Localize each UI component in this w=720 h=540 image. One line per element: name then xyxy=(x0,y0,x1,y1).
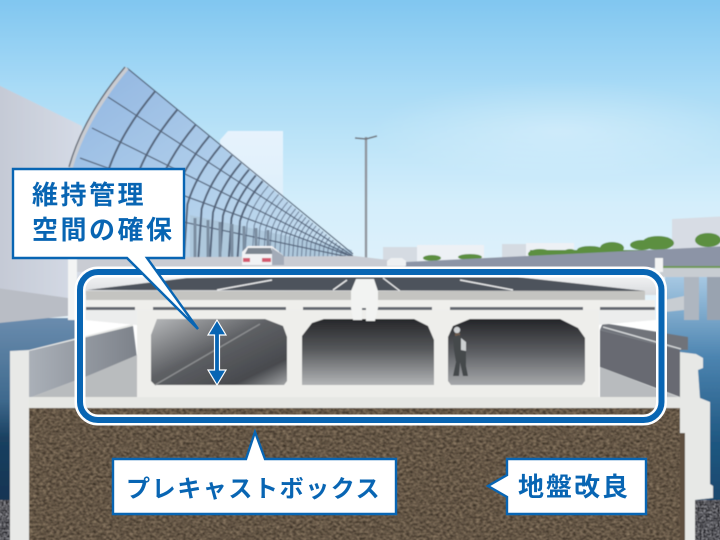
soil texture xyxy=(29,408,680,540)
left retaining wall xyxy=(10,324,133,540)
right frame post xyxy=(655,258,663,272)
callout text line 2: 空間の確保 xyxy=(32,215,175,245)
right overpass with piers xyxy=(405,246,720,320)
deck top band xyxy=(85,300,655,310)
right retaining wall xyxy=(660,340,713,540)
soil texture right edge xyxy=(680,433,685,540)
left cantilever xyxy=(85,310,137,325)
riprap rocks left xyxy=(0,500,10,540)
lane markings xyxy=(217,278,513,291)
box left cell lane line xyxy=(155,324,260,385)
box left cell xyxy=(151,319,287,385)
asphalt road surface xyxy=(87,276,645,291)
right water xyxy=(665,275,720,540)
right cantilever xyxy=(597,310,655,325)
left stone embankment xyxy=(0,287,68,324)
trees xyxy=(423,233,720,261)
precast box label: プレキャストボックス xyxy=(126,476,381,503)
soft clouds xyxy=(370,80,720,180)
ground improvement label: 地盤改良 xyxy=(518,472,630,502)
noise barrier with curved glass roof xyxy=(65,67,355,258)
roadway behind the frame xyxy=(68,256,405,272)
concrete road slab xyxy=(86,291,645,300)
frame interior top fade xyxy=(83,275,658,295)
improved ground soil xyxy=(29,408,685,540)
white car xyxy=(242,246,284,265)
left grey building xyxy=(0,81,82,300)
right wall inner faces xyxy=(600,323,688,398)
callout: maintenance space xyxy=(13,169,198,329)
box centre cell xyxy=(302,319,434,385)
white tower building xyxy=(220,131,283,258)
callout text line 1: 維持管理 xyxy=(32,180,146,210)
distant buildings xyxy=(383,216,720,262)
concrete floor slab xyxy=(29,397,680,409)
height arrow xyxy=(208,320,226,385)
central median barrier xyxy=(351,279,378,321)
distant car xyxy=(387,258,406,266)
left water xyxy=(0,318,80,540)
sky background xyxy=(0,0,720,320)
riprap rocks right xyxy=(695,500,720,540)
dark bearing strips xyxy=(86,307,655,310)
box right cell xyxy=(448,319,585,385)
blue highlight frame xyxy=(80,272,662,420)
callout: precast box xyxy=(113,432,396,514)
lamp post xyxy=(355,136,377,258)
callout: ground improvement xyxy=(488,459,646,514)
worker in helmet xyxy=(453,327,468,376)
left frame post xyxy=(68,258,77,320)
left floor xyxy=(29,355,137,398)
precast box body xyxy=(137,310,599,397)
left wall inner face xyxy=(29,326,137,398)
